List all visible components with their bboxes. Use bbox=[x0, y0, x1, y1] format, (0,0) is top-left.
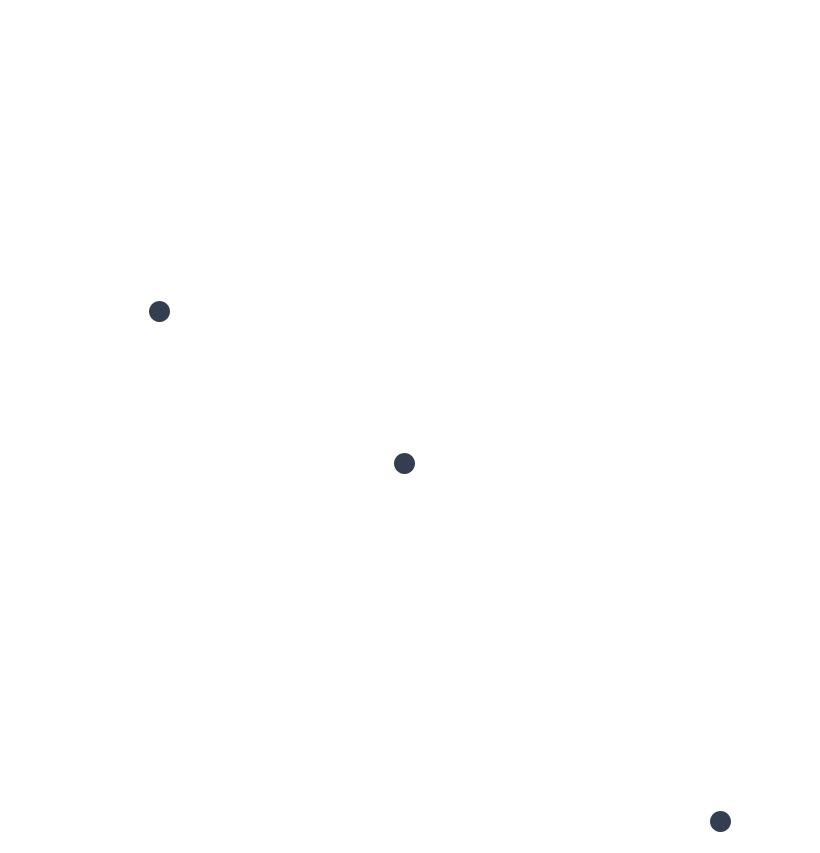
data point 2 bbox=[394, 453, 415, 474]
data point 3 bbox=[710, 811, 731, 832]
data point 1 bbox=[149, 301, 170, 322]
